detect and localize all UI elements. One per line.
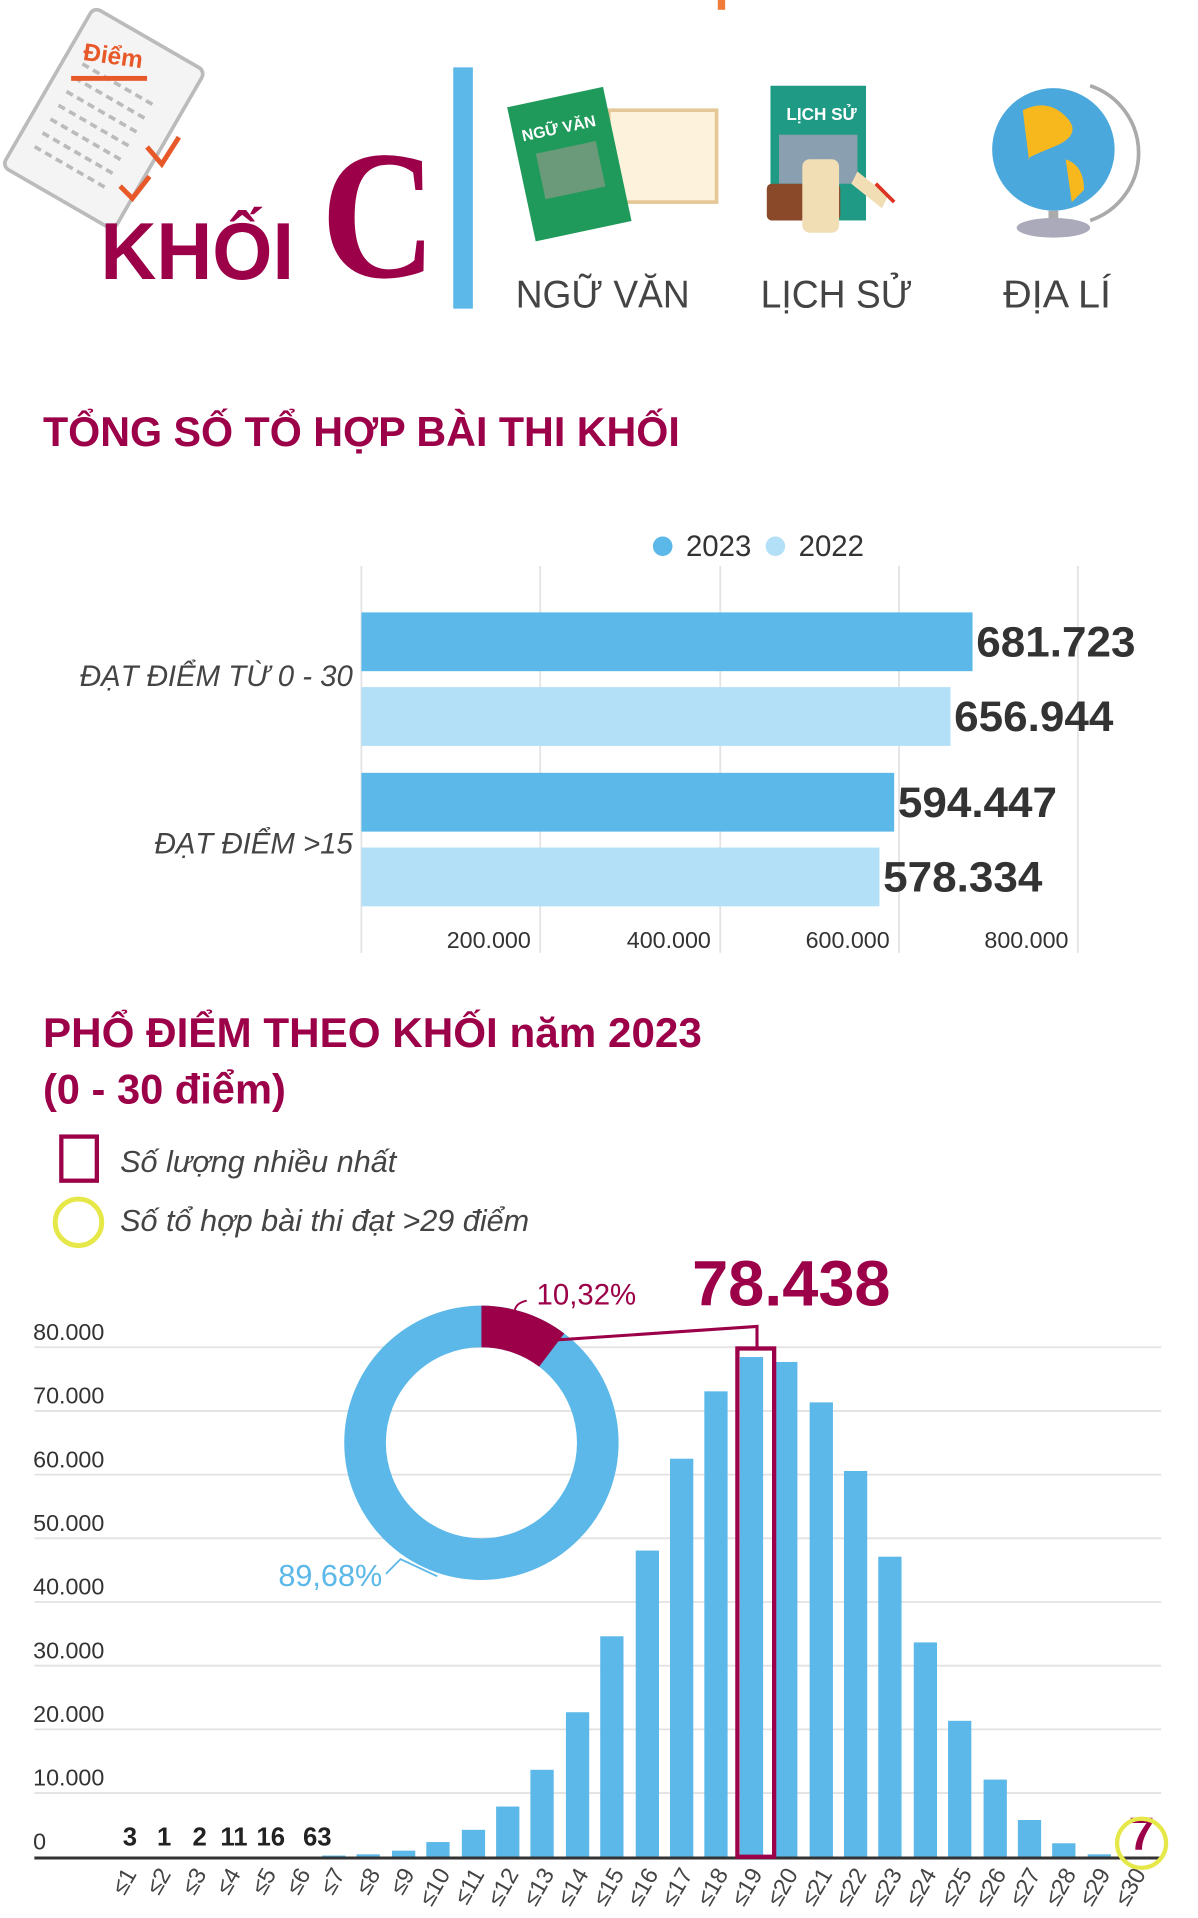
small counts: 1	[157, 1824, 171, 1852]
bar chart: totals: ĐẠT ĐIỂM TỪ 0 - 30	[80, 659, 353, 693]
x labels: ≤23	[865, 1863, 907, 1910]
small counts	[123, 1824, 332, 1852]
histogram: 70.000	[33, 1383, 104, 1409]
x labels: ≤14	[552, 1863, 594, 1910]
histogram: 10.000	[33, 1765, 104, 1791]
x labels: ≤13	[517, 1863, 559, 1910]
x labels: ≤8	[350, 1863, 385, 1899]
donut chart	[278, 1278, 636, 1593]
histogram: 50.000	[33, 1510, 104, 1536]
subject labels	[516, 272, 1111, 316]
callout: 7: 7	[1129, 1807, 1155, 1859]
x labels: ≤30	[1109, 1863, 1151, 1910]
x labels: ≤22	[830, 1863, 872, 1910]
title: KHỐI C: C	[321, 113, 436, 317]
histogram: 20.000	[33, 1701, 104, 1727]
legend: years	[653, 530, 864, 563]
subject labels: NGỮ VĂN	[516, 272, 690, 316]
histogram	[33, 1319, 1161, 1910]
icon: score paper	[2, 7, 205, 230]
legend: highlights: Số tổ hợp bài thi đạt >29 điểm	[120, 1204, 529, 1238]
x labels: ≤27	[1004, 1863, 1045, 1910]
x labels: ≤9	[384, 1863, 420, 1899]
legend: highlights: Số lượng nhiều nhất	[120, 1145, 398, 1179]
callout: max value: 78.438	[692, 1249, 890, 1320]
bar chart: totals: 600.000	[806, 927, 890, 953]
title: KHỐI C: KHỐI	[101, 206, 294, 297]
x labels: ≤15	[587, 1863, 629, 1910]
x labels: ≤17	[656, 1863, 698, 1910]
x labels: ≤16	[621, 1863, 663, 1910]
histogram: 60.000	[33, 1446, 104, 1472]
subject labels: LỊCH SỬ	[761, 272, 913, 316]
x labels: ≤19	[726, 1863, 767, 1910]
heading: pho diem: (0 - 30 điểm)	[43, 1066, 286, 1113]
histogram: 30.000	[33, 1637, 104, 1663]
bar chart: totals: 594.447	[898, 779, 1057, 827]
icon: ngu van book: NGỮ VĂN	[520, 110, 597, 145]
legend: years: 2023	[686, 530, 751, 563]
small counts: 11	[220, 1824, 248, 1852]
x labels: ≤1	[106, 1863, 142, 1899]
x labels: ≤18	[691, 1863, 733, 1910]
x labels: ≤21	[795, 1863, 837, 1910]
x labels	[106, 1863, 1151, 1910]
x labels: ≤2	[141, 1863, 176, 1899]
top orange fragment	[718, 0, 725, 10]
bar chart: totals: 800.000	[984, 927, 1069, 953]
x labels: ≤20	[761, 1863, 803, 1910]
donut chart: 89,68%	[278, 1559, 382, 1593]
small counts: 2	[193, 1824, 207, 1852]
title: KHỐI C	[101, 113, 436, 317]
callout: max value	[557, 1249, 890, 1857]
x labels: ≤24	[900, 1863, 941, 1910]
x labels: ≤6	[280, 1863, 316, 1899]
legend: years: 2022	[799, 530, 864, 563]
x labels: ≤12	[482, 1863, 524, 1910]
subject labels: ĐỊA LÍ	[1003, 273, 1111, 316]
bar chart: totals: 681.723	[976, 618, 1135, 666]
x labels: ≤4	[210, 1863, 246, 1899]
bar chart: totals: 200.000	[447, 927, 531, 953]
heading: pho diem: PHỔ ĐIỂM THEO KHỐI năm 2023	[43, 1007, 702, 1056]
histogram: 40.000	[33, 1574, 104, 1600]
bar chart: totals: ĐẠT ĐIỂM >15	[154, 827, 353, 861]
bar chart: totals: 578.334	[883, 854, 1043, 902]
x labels: ≤25	[935, 1863, 977, 1910]
icon: globe	[992, 86, 1139, 238]
small counts: 16	[256, 1824, 285, 1852]
bar chart: totals: 400.000	[627, 927, 711, 953]
x labels: ≤29	[1073, 1863, 1115, 1910]
bar chart: totals	[80, 566, 1135, 953]
x labels: ≤28	[1039, 1863, 1081, 1910]
donut chart: 10,32%	[537, 1278, 636, 1311]
x labels: ≤7	[314, 1863, 350, 1899]
icon: score paper: Điểm	[82, 39, 145, 74]
bar chart: totals: 656.944	[954, 693, 1114, 741]
histogram: 80.000	[33, 1319, 104, 1345]
heading: pho diem	[43, 1007, 702, 1113]
x labels: ≤26	[969, 1863, 1011, 1910]
heading: tong so: TỔNG SỐ TỔ HỢP BÀI THI KHỐI	[43, 406, 680, 455]
x labels: ≤11	[448, 1863, 489, 1908]
divider bar	[453, 67, 473, 309]
x labels: ≤5	[246, 1863, 281, 1899]
small counts: 63	[303, 1824, 332, 1852]
small counts: 3	[123, 1824, 137, 1852]
icon: lich su book: LỊCH SỬ	[786, 104, 858, 124]
icon: ngu van book	[507, 87, 717, 241]
x labels: ≤3	[176, 1863, 211, 1899]
legend: highlights	[55, 1137, 529, 1246]
x labels: ≤10	[413, 1863, 455, 1910]
callout: 7	[1117, 1807, 1166, 1868]
icon: lich su book	[767, 86, 894, 233]
histogram: 0	[33, 1828, 46, 1854]
